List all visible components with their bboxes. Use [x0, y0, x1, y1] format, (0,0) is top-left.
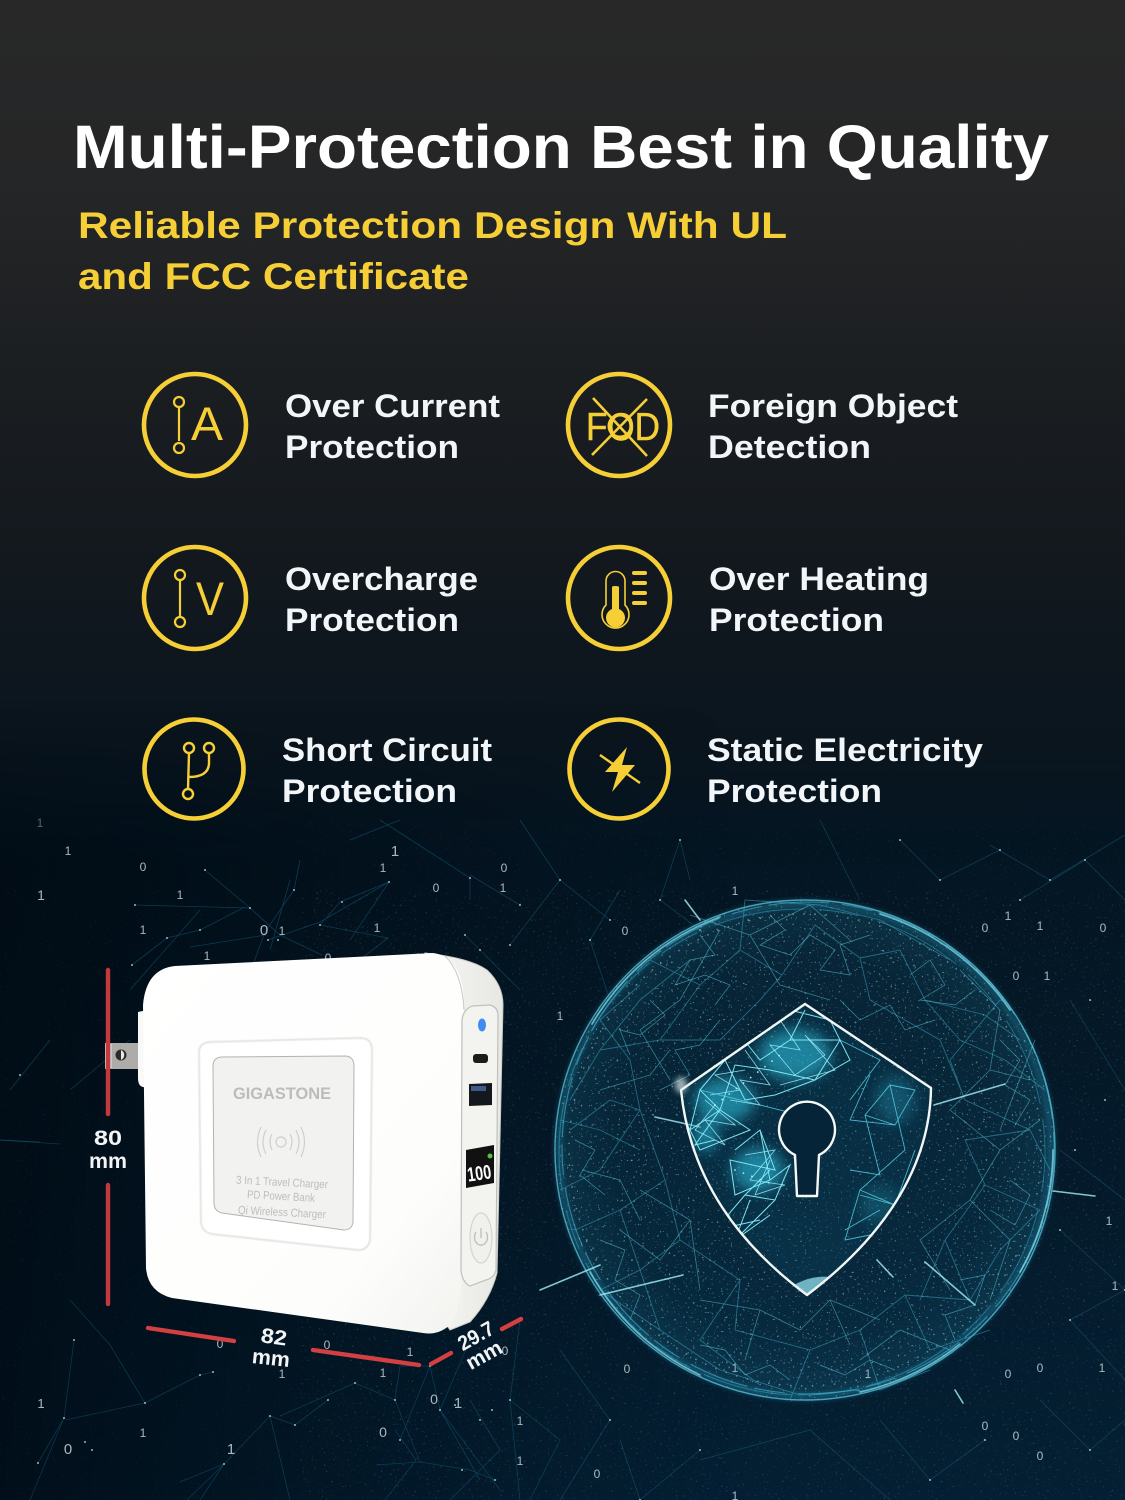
binary digits: 1	[517, 1414, 524, 1428]
binary digits: 1	[1112, 1279, 1119, 1293]
binary digits: 0	[64, 1441, 72, 1458]
icon: crossed lightning bolt	[570, 720, 668, 818]
binary digits: 1	[865, 1367, 872, 1381]
product: travel charger	[105, 953, 503, 1334]
charger side	[425, 953, 503, 1330]
status LED	[478, 1018, 486, 1032]
binary digits: 1	[140, 923, 147, 937]
label: Protection	[285, 429, 459, 465]
battery display: 100	[466, 1161, 493, 1187]
dimension: depth 29.7 mm	[431, 1317, 521, 1375]
icon: FOD crossed	[568, 374, 670, 476]
binary digits: 0	[622, 924, 629, 938]
binary digits: 0	[324, 1338, 331, 1352]
binary digits	[37, 816, 1119, 1500]
icon: ammeter A: A	[191, 397, 224, 450]
binary digits: 1	[732, 884, 739, 898]
pad text	[236, 1175, 328, 1221]
binary digits: 0	[1013, 1429, 1020, 1443]
label: Overcharge	[285, 561, 478, 597]
binary digits: 0	[624, 1362, 631, 1376]
charger plug	[105, 1010, 147, 1088]
binary digits: 1	[380, 861, 387, 875]
ports panel	[461, 1005, 498, 1286]
icon: branching circuit	[144, 720, 244, 818]
dimension: width 82 mm: 82	[259, 1324, 288, 1351]
label	[282, 732, 492, 809]
dimension: depth 29.7 mm: mm	[462, 1336, 506, 1375]
network mesh in globe	[560, 900, 1050, 1400]
network background	[0, 820, 1125, 1500]
feature: over heating protection	[568, 547, 929, 649]
binary digits: 1	[37, 816, 44, 830]
binary digits: 1	[557, 1009, 564, 1023]
globe rim	[555, 900, 1055, 1400]
dimension: height 80 mm: 80	[94, 1127, 122, 1150]
binary digits: 0	[379, 1424, 387, 1440]
title: Multi-Protection Best in Quality	[73, 113, 1049, 181]
wireless pad frame	[199, 1038, 372, 1250]
binary digits: 1	[454, 1395, 462, 1412]
feature: static electricity protection	[570, 720, 983, 818]
binary digits: 1	[140, 1426, 147, 1440]
pad text: 3 In 1 Travel Charger	[236, 1175, 328, 1191]
binary digits: 0	[982, 921, 989, 935]
binary digits: 1	[380, 1366, 387, 1380]
binary digits: 1	[204, 949, 211, 963]
USB-C port	[473, 1054, 488, 1063]
binary digits: 0	[1005, 1367, 1012, 1381]
brand name: GIGASTONE	[233, 1084, 331, 1103]
binary digits: 0	[325, 951, 332, 965]
binary digits: 1	[279, 924, 286, 938]
label: Foreign Object	[708, 388, 958, 424]
shield glow	[675, 1077, 687, 1093]
dimension: width 82 mm: mm	[251, 1345, 291, 1372]
label: Protection	[282, 773, 457, 809]
feature: short circuit protection	[144, 720, 492, 818]
binary digits: 1	[1044, 969, 1051, 983]
binary digits: 0	[1037, 1361, 1044, 1375]
binary digits: 0	[501, 861, 508, 875]
label: Short Circuit	[282, 732, 492, 768]
bright streaks	[540, 900, 1095, 1403]
charger front face	[143, 953, 464, 1334]
binary digits: 1	[65, 844, 72, 858]
binary digits: 0	[1100, 921, 1107, 935]
dimension: height 80 mm	[89, 970, 127, 1304]
binary digits: 0	[217, 1337, 224, 1351]
binary digits: 1	[1005, 909, 1012, 923]
label	[709, 561, 929, 638]
binary digits: 1	[1099, 1361, 1106, 1375]
binary digits: 1	[1037, 919, 1044, 933]
feature: over current protection	[144, 374, 500, 476]
icon: voltmeter V: V	[196, 572, 225, 625]
binary digits: 0	[140, 860, 147, 874]
icon: FOD crossed: FOD	[586, 406, 660, 449]
dimension: height 80 mm: mm	[89, 1150, 127, 1173]
binary digits: 1	[391, 843, 399, 860]
subtitle: and FCC Certificate	[78, 256, 469, 297]
icon: ammeter A	[144, 374, 246, 476]
label: Over Current	[285, 388, 500, 424]
binary digits: 1	[407, 1345, 414, 1359]
icon: wireless charging	[258, 1127, 304, 1157]
binary digits: 0	[430, 1391, 438, 1407]
label: Protection	[285, 602, 459, 638]
label: Protection	[709, 602, 884, 638]
binary digits: 0	[1037, 1449, 1044, 1463]
globe glow ring	[559, 904, 1051, 1396]
binary digits: 0	[1013, 969, 1020, 983]
pad text: PD Power Bank	[247, 1189, 315, 1205]
icon: voltmeter V	[144, 547, 246, 649]
icon: thermometer	[568, 547, 670, 649]
binary digits: 1	[177, 888, 184, 902]
USB-A port	[469, 1083, 492, 1106]
label: Detection	[708, 429, 871, 465]
binary digits: 1	[279, 1367, 286, 1381]
binary digits: 1	[732, 1361, 739, 1375]
wireless pad	[213, 1056, 354, 1230]
binary digits: 0	[982, 1419, 989, 1433]
keyhole	[779, 1102, 835, 1196]
binary digits: 1	[517, 1454, 524, 1468]
binary digits: 1	[500, 881, 507, 895]
label	[285, 388, 500, 465]
shield	[675, 1004, 931, 1297]
binary digits: 0	[433, 881, 440, 895]
feature: foreign object detection	[568, 374, 958, 476]
binary digits: 1	[1106, 1214, 1113, 1228]
binary digits: 0	[502, 1344, 509, 1358]
binary digits: 1	[37, 1396, 45, 1411]
dimension: depth 29.7 mm: 29.7	[454, 1317, 498, 1356]
label	[285, 561, 478, 638]
power button	[470, 1213, 492, 1263]
label: Protection	[707, 773, 882, 809]
binary digits: 0	[415, 951, 422, 965]
subtitle	[78, 205, 787, 297]
binary digits: 1	[374, 921, 381, 935]
label	[707, 732, 983, 809]
label: Static Electricity	[707, 732, 983, 768]
subtitle: Reliable Protection Design With UL	[78, 205, 787, 246]
label	[708, 388, 958, 465]
binary digits: 0	[594, 1467, 601, 1481]
network globe	[540, 885, 1095, 1415]
binary digits: 0	[260, 922, 268, 939]
pad text: Qi Wireless Charger	[238, 1205, 326, 1221]
battery display	[466, 1145, 494, 1188]
binary digits: 1	[37, 887, 45, 903]
binary digits: 1	[227, 1441, 235, 1458]
dimension: width 82 mm	[148, 1324, 419, 1372]
feature: overcharge protection	[144, 547, 478, 649]
label: Over Heating	[709, 561, 929, 597]
